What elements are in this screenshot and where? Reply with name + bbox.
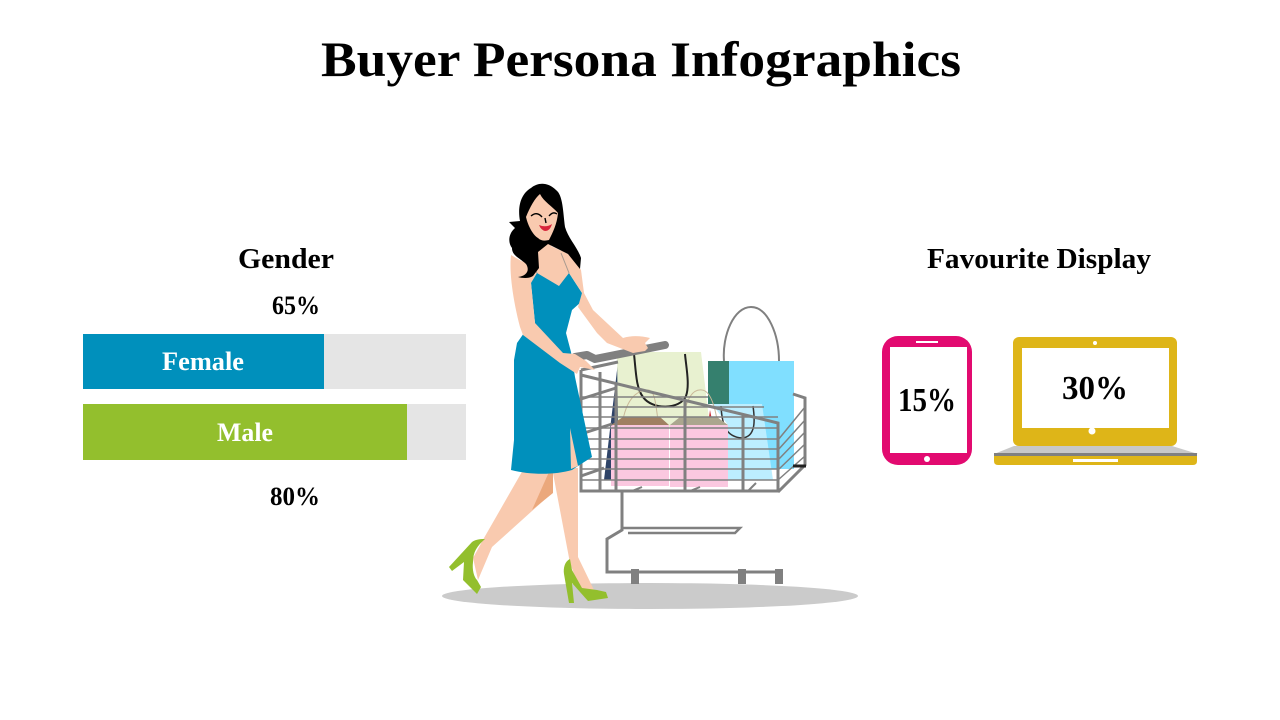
dress xyxy=(511,273,592,474)
cart handle xyxy=(565,345,665,367)
illustration: shopper with cart xyxy=(442,184,858,609)
dress straps xyxy=(526,252,569,273)
arm on left xyxy=(510,255,595,374)
ground shadow xyxy=(442,583,858,609)
cart base xyxy=(607,492,783,584)
label: 65%: 65% xyxy=(272,291,320,320)
bar: female: Female xyxy=(162,347,244,376)
icon: laptop xyxy=(994,337,1198,465)
arm on right xyxy=(561,250,650,353)
icon: tablet xyxy=(882,336,972,465)
skin: neck, shoulders and chest xyxy=(522,232,580,288)
cart basket xyxy=(581,362,806,492)
shopping cart xyxy=(565,345,806,584)
icon: laptop: 30% xyxy=(1062,370,1128,407)
hair xyxy=(509,184,581,278)
facial features xyxy=(531,213,557,231)
label: 80%: 80% xyxy=(270,482,320,511)
heading: favourite display: Favourite Display xyxy=(927,244,1151,275)
bar: male xyxy=(83,404,466,460)
woman xyxy=(449,184,650,603)
front shoe xyxy=(564,559,608,603)
front leg xyxy=(552,468,594,590)
bar: male: Male xyxy=(217,418,273,447)
panel: gender xyxy=(83,244,466,511)
title: Buyer Persona Infographics xyxy=(321,31,961,87)
bar: female xyxy=(83,334,466,389)
back shoe xyxy=(449,539,485,594)
shopping bags xyxy=(604,307,794,487)
heading: gender: Gender xyxy=(238,244,334,275)
icon: tablet: 15% xyxy=(898,382,956,419)
back leg xyxy=(473,470,552,580)
face xyxy=(526,194,558,241)
panel: favourite display xyxy=(882,244,1198,465)
